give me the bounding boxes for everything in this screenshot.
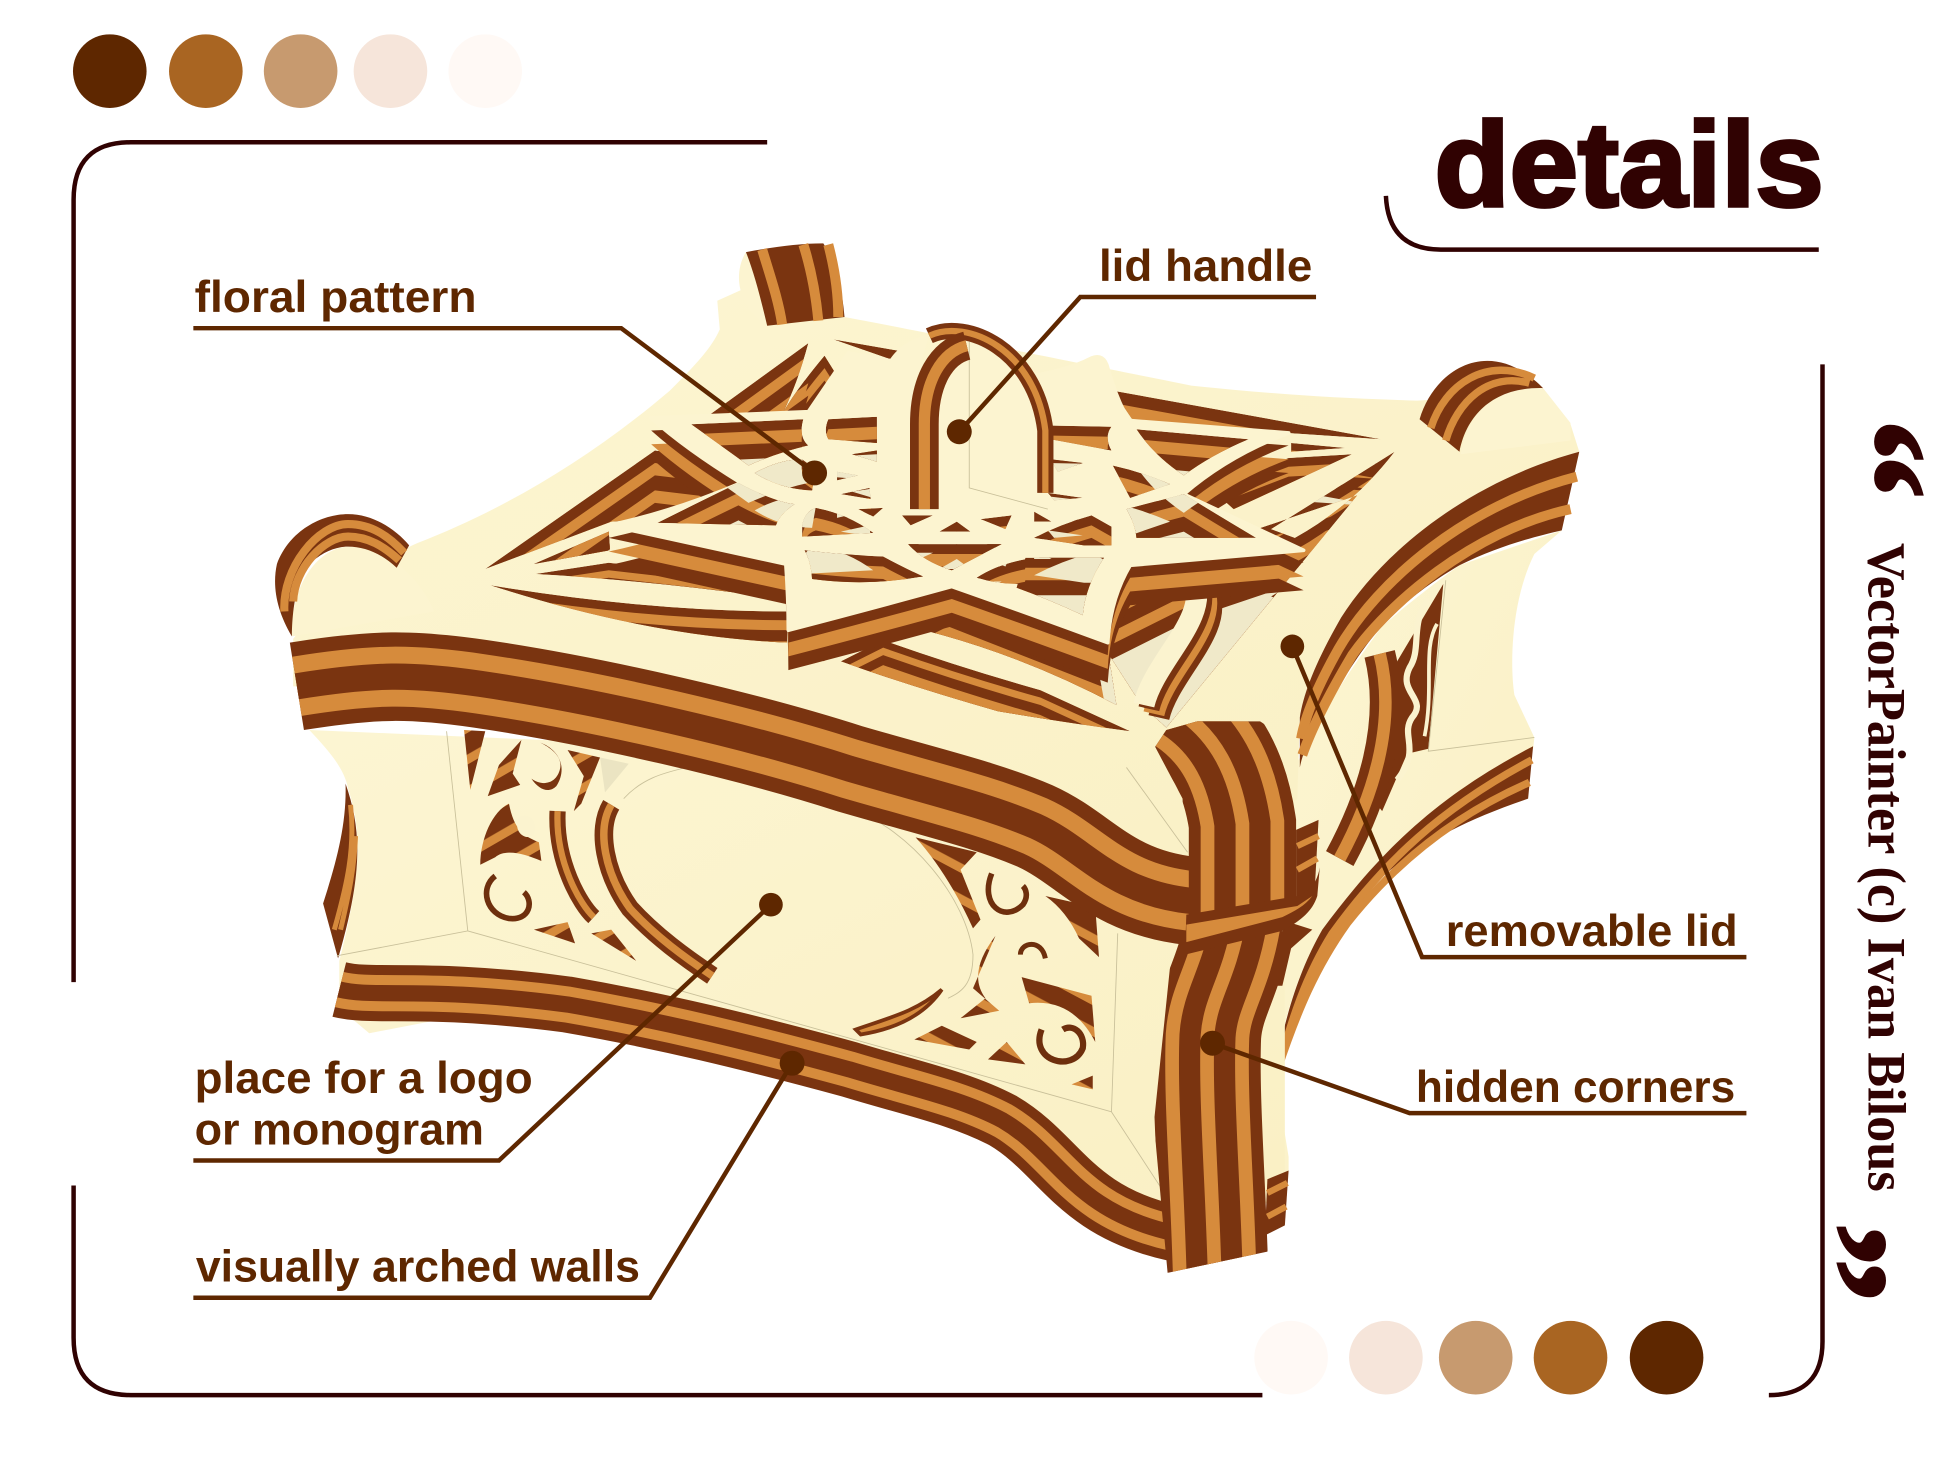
- callout: floral pattern: floral pattern: [195, 271, 477, 322]
- callout: removable lid: removable lid: [1446, 905, 1738, 956]
- callout: visually arched walls: [193, 1051, 805, 1298]
- left crescent: [604, 805, 712, 976]
- colour swatches: bottom: [1254, 1321, 1703, 1394]
- wooden box illustration: [275, 243, 1579, 1285]
- lower corner post: [1207, 921, 1312, 1285]
- callout: lid handle: [947, 240, 1316, 444]
- front wall: [309, 730, 1285, 1233]
- lid front band: [297, 677, 1191, 901]
- callout: floral pattern: [193, 271, 827, 485]
- panel seam lines: [337, 731, 1170, 1202]
- lid cross strip: [1185, 867, 1320, 955]
- callout: place for a logo: [193, 893, 783, 1161]
- callout: removable lid: [1280, 635, 1746, 957]
- author credit: VectorPainter (c) Ivan Bilous: [1857, 543, 1917, 1192]
- colour swatches: top: [73, 34, 522, 108]
- frame lines: [74, 142, 1823, 1395]
- callout: lid handle: lid handle: [1099, 240, 1312, 291]
- lid right band: [1300, 452, 1579, 767]
- callout: hidden corners: [1200, 1031, 1746, 1113]
- callout: place for a logo: or monogram: [195, 1103, 484, 1154]
- lid top surface: [293, 290, 1579, 901]
- lid handle: [878, 331, 1048, 512]
- back knob: [739, 243, 845, 326]
- bottom band: [339, 990, 1173, 1233]
- lid recess cut-outs: [486, 340, 1394, 732]
- left side edge: [323, 784, 357, 958]
- closing quote mark: ”: [1747, 1222, 1920, 1303]
- callout: hidden corners: hidden corners: [1416, 1061, 1735, 1112]
- floral star pattern: [609, 353, 1304, 683]
- right bottom band: [1270, 746, 1533, 1098]
- title: details: [1435, 99, 1824, 232]
- right wall crescent: [1340, 654, 1385, 859]
- callout: visually arched walls: visually arched walls: [196, 1241, 640, 1292]
- web strip: [1144, 580, 1212, 718]
- right knob: [1420, 361, 1571, 454]
- left knob: [275, 514, 434, 636]
- left filigree: [464, 730, 712, 976]
- callout: place for a logo: place for a logo: [195, 1052, 533, 1103]
- upper corner post: [1126, 721, 1320, 914]
- right filigree: [856, 837, 1099, 1089]
- right wall: [1247, 530, 1562, 1185]
- logo plaque outline: [624, 764, 973, 998]
